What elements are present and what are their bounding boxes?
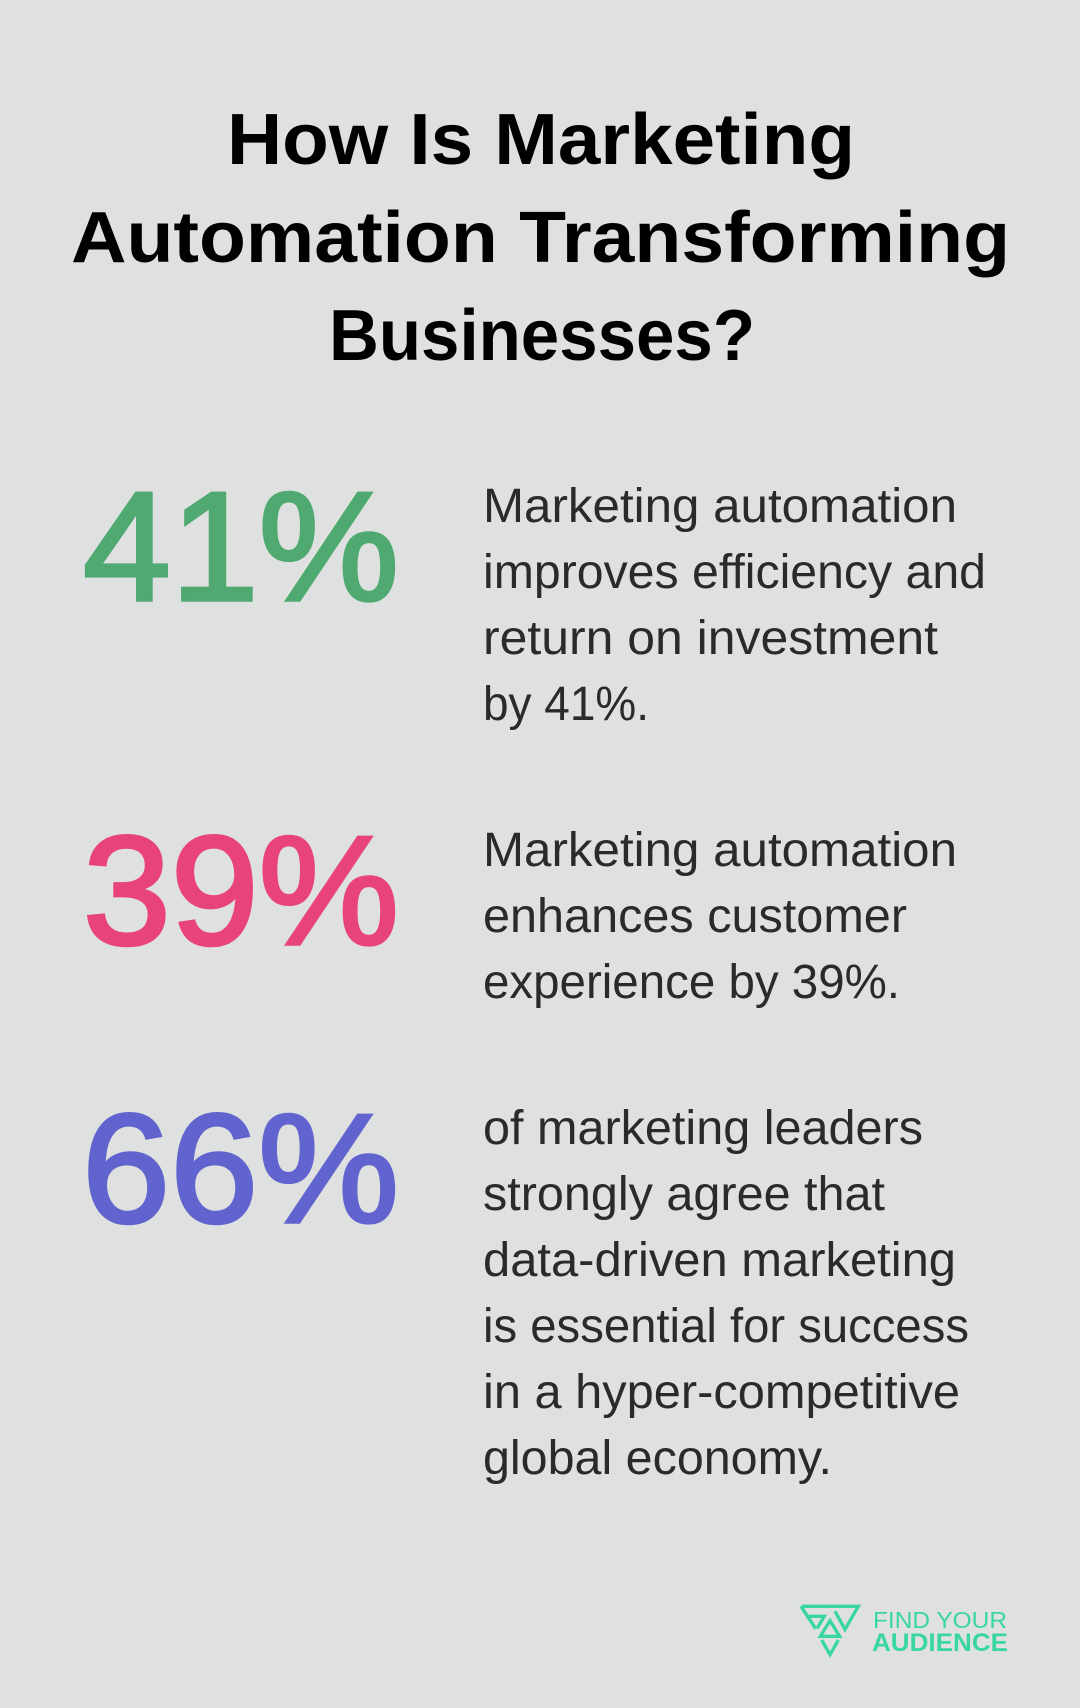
stat description: data-driven marketing: is essential for success <box>483 1300 969 1353</box>
title: How Is Marketing <box>227 100 855 180</box>
stat description: efficiency and ROI: improves efficiency and <box>483 546 986 599</box>
wordmark <box>872 1607 1008 1657</box>
stat number: 66%: 66% <box>82 1082 399 1255</box>
title: Automation Transforming <box>71 198 1010 278</box>
stat description: efficiency and ROI: return on investment <box>483 612 938 665</box>
panel: stat 39% <box>83 804 957 1009</box>
panel: stat 66% <box>82 1082 969 1485</box>
panel: stat 41% <box>83 460 986 731</box>
stat description: data-driven marketing: in a hyper-competitive <box>483 1366 960 1419</box>
stat description: data-driven marketing: of marketing leaders <box>483 1102 923 1155</box>
stat description: customer experience: experience by 39%. <box>483 956 900 1009</box>
stat description: efficiency and ROI <box>483 480 986 731</box>
stat description: data-driven marketing <box>483 1102 969 1485</box>
stat number: 39%: 39% <box>83 804 399 977</box>
stat description: data-driven marketing: data-driven marketing <box>483 1234 956 1287</box>
stat description: customer experience: Marketing automation <box>483 824 957 877</box>
title: Businesses? <box>329 296 755 376</box>
wordmark: FIND YOUR <box>873 1607 1007 1633</box>
stat description: customer experience <box>483 824 957 1009</box>
stat description: efficiency and ROI: by 41%. <box>483 678 649 731</box>
logo: Find Your Audience <box>801 1606 1008 1657</box>
wordmark: AUDIENCE <box>872 1629 1008 1657</box>
stat description: data-driven marketing: global economy. <box>483 1432 832 1485</box>
icon: triangle logo mark <box>801 1606 858 1655</box>
title <box>71 100 1010 376</box>
stat description: efficiency and ROI: Marketing automation <box>483 480 957 533</box>
stat number: 41%: 41% <box>83 460 399 633</box>
stat description: data-driven marketing: strongly agree that <box>483 1168 885 1221</box>
stat description: customer experience: enhances customer <box>483 890 907 943</box>
